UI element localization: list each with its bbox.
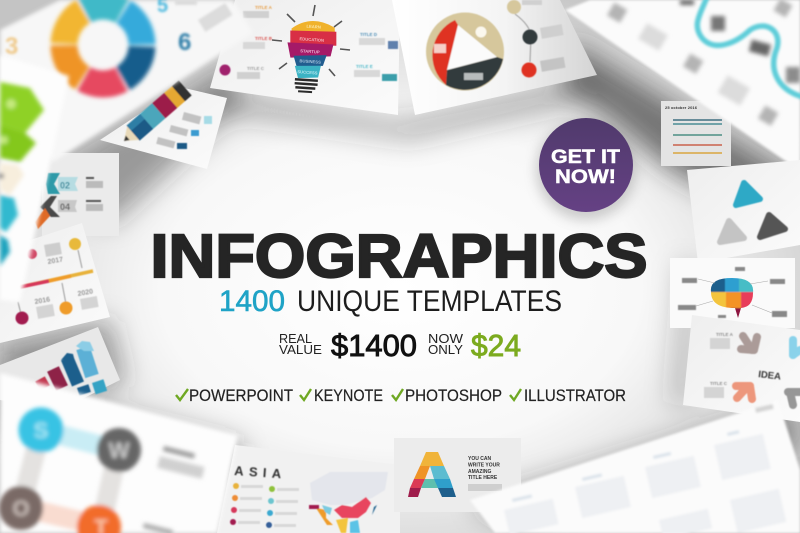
icon: lightbulb infographic: LEARN bbox=[306, 24, 321, 30]
bulb card labels: TITLE A bbox=[255, 5, 273, 10]
timeline content: 2016 bbox=[34, 296, 51, 306]
software list: POWERPOINT bbox=[189, 386, 293, 405]
icon: puzzle brain bbox=[710, 278, 754, 318]
letter A card title: YOU CAN bbox=[468, 456, 491, 462]
icon: lightbulb infographic: STARTUP bbox=[300, 48, 320, 55]
panel: blurred SWOT card bbox=[0, 373, 238, 533]
price row: VALUE bbox=[279, 343, 322, 357]
calendar grids bbox=[504, 404, 786, 533]
panel: timeline card bbox=[0, 223, 110, 343]
SWOT diagram: O bbox=[12, 496, 30, 521]
Asia map bbox=[309, 472, 388, 533]
icon: checkmark bbox=[510, 389, 521, 400]
icon: lightbulb infographic bbox=[284, 19, 338, 95]
icon: teal arrow 02 bbox=[35, 173, 78, 229]
idea labels: TITLE C bbox=[710, 381, 728, 386]
panel: pencil card bbox=[100, 80, 227, 169]
icon: teal arrow 02: 04 bbox=[60, 202, 70, 212]
panel: idea card bbox=[683, 315, 800, 422]
letter A card title bbox=[468, 456, 500, 481]
price row: REAL bbox=[279, 332, 312, 346]
price row bbox=[279, 328, 521, 363]
panel: arrows 02 04 card bbox=[35, 153, 119, 236]
icon: pencil bbox=[117, 80, 192, 149]
bulb rays bbox=[272, 5, 350, 76]
rising arrows chart bbox=[40, 341, 107, 396]
wheel labels bbox=[5, 0, 233, 60]
title: INFOGRAPHICS bbox=[150, 222, 648, 290]
panel: blurred wave card bbox=[565, 0, 800, 164]
brain labels bbox=[678, 267, 787, 318]
bulb card labels: TITLE C bbox=[247, 66, 265, 71]
price row: $1400 bbox=[331, 328, 417, 363]
panel: blurred calendar card bbox=[470, 400, 800, 533]
icon: checkmark bbox=[300, 389, 311, 400]
hexagon arrows bbox=[0, 82, 44, 266]
panel: pie chart card bbox=[392, 0, 597, 115]
button: get it now: NOW! bbox=[555, 166, 616, 188]
panel: brain card bbox=[670, 258, 795, 328]
icon: checkmark bbox=[392, 389, 403, 400]
SWOT diagram: W bbox=[109, 438, 130, 463]
panel: letter A card bbox=[394, 438, 521, 512]
timeline nodes bbox=[507, 0, 566, 78]
blurred icons bbox=[607, 0, 800, 126]
icon: checkmark bbox=[176, 389, 188, 400]
subtitle bbox=[219, 285, 562, 318]
panel: lightbulb card bbox=[210, 0, 400, 115]
panel: Asia map card bbox=[217, 445, 400, 533]
subtitle: 1400 bbox=[219, 285, 285, 318]
letter A card title: AMAZING bbox=[468, 469, 491, 475]
price row: $24 bbox=[471, 328, 521, 363]
price row: ONLY bbox=[428, 343, 464, 357]
timeline content bbox=[16, 238, 99, 324]
panel: triangles card bbox=[687, 160, 800, 263]
icon: lightbulb infographic: EDUCATION bbox=[299, 36, 324, 43]
subtitle: UNIQUE TEMPLATES bbox=[297, 285, 562, 318]
idea labels: TITLE A bbox=[716, 332, 734, 337]
bulb card labels bbox=[220, 5, 398, 81]
idea arrows bbox=[736, 336, 800, 405]
icon: colourful letter A bbox=[408, 452, 456, 497]
software list: ILLUSTRATOR bbox=[524, 386, 626, 405]
panel: calendar schedule card bbox=[661, 101, 731, 166]
button: get it now: GET IT bbox=[551, 146, 620, 168]
icon: teal arrow 02: 02 bbox=[60, 180, 70, 190]
letter A card title: TITLE HERE bbox=[468, 475, 498, 481]
panel: blurred wheel card bbox=[0, 0, 253, 162]
pencil card text bbox=[156, 112, 212, 149]
idea labels: IDEA bbox=[758, 369, 782, 383]
panel: blurred green arrows card bbox=[0, 55, 69, 302]
icon: three rounded triangles bbox=[720, 183, 785, 242]
price row: NOW bbox=[428, 332, 463, 346]
wheel chart bbox=[49, 0, 157, 99]
legend dots bbox=[230, 483, 299, 528]
button: get it now bbox=[536, 118, 636, 220]
software list bbox=[176, 386, 626, 405]
wheel labels: 6 bbox=[178, 29, 191, 56]
SWOT blurred text bbox=[143, 446, 205, 533]
heading: Asia: ASIA bbox=[234, 463, 282, 481]
bulb card labels: TITLE E bbox=[356, 64, 373, 69]
software list: PHOTOSHOP bbox=[405, 386, 502, 405]
software list: KEYNOTE bbox=[314, 386, 383, 405]
letter A card title: WRITE YOUR bbox=[468, 462, 500, 468]
wave line bbox=[697, 0, 800, 97]
brain connectors bbox=[696, 279, 772, 313]
timeline content: 2020 bbox=[77, 288, 94, 298]
arrows card text bbox=[86, 177, 103, 211]
pie chart bbox=[426, 12, 504, 90]
letter A card body text bbox=[468, 484, 502, 491]
wheel labels: 3 bbox=[5, 33, 18, 60]
bulb card labels: TITLE B bbox=[255, 36, 273, 41]
panel: calendar schedule card: 25 october 2016 bbox=[665, 105, 698, 110]
icon: lightbulb infographic: BUSINESS bbox=[299, 58, 321, 65]
SWOT diagram: S bbox=[34, 418, 48, 443]
bulb card labels: TITLE D bbox=[360, 32, 378, 37]
panel: rising arrows card bbox=[0, 327, 120, 410]
SWOT diagram bbox=[0, 408, 141, 533]
icon: lightbulb infographic: SUCCESS bbox=[297, 69, 318, 76]
idea labels bbox=[704, 332, 782, 398]
timeline content: 2017 bbox=[47, 256, 64, 266]
